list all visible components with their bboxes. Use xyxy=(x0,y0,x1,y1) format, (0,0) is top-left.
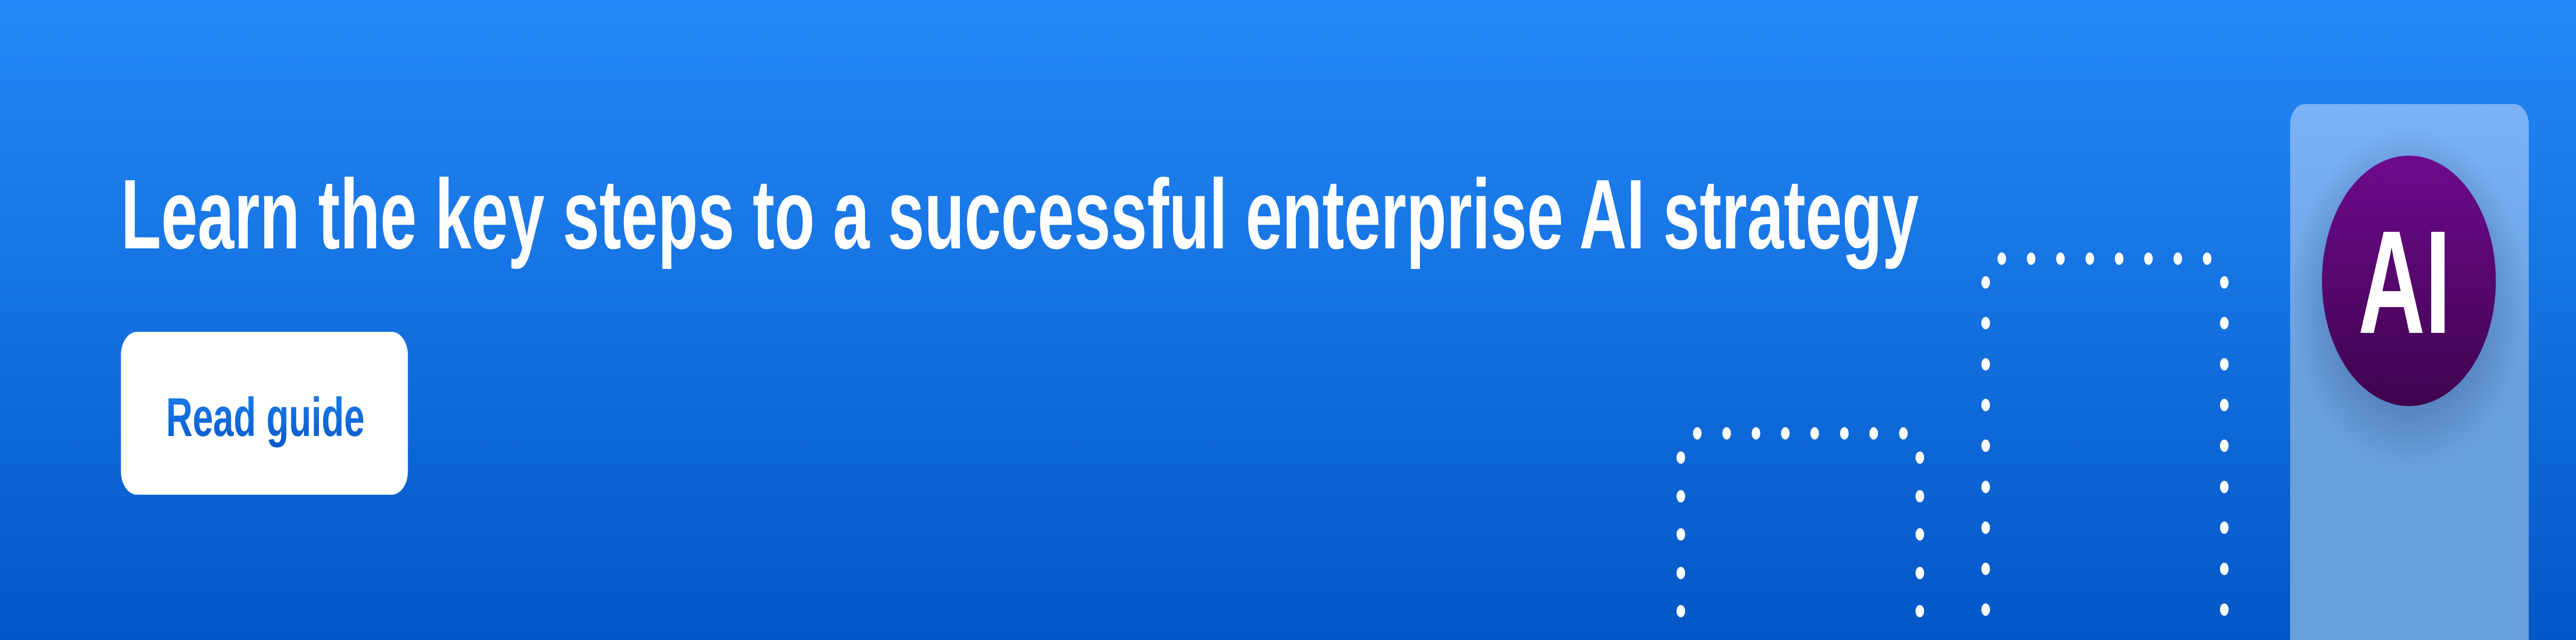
icon: AI badge: AI xyxy=(2358,200,2451,364)
icon: AI badge xyxy=(2322,156,2496,406)
dotted shape: large xyxy=(1981,252,2229,616)
panel: AI card xyxy=(2290,104,2529,640)
dotted shape: small xyxy=(1676,427,1924,617)
title: Learn the key steps to a successful enterprise AI strategy xyxy=(121,159,1919,270)
button: Read guide: Read guide xyxy=(166,387,365,448)
button: Read guide xyxy=(121,332,408,495)
